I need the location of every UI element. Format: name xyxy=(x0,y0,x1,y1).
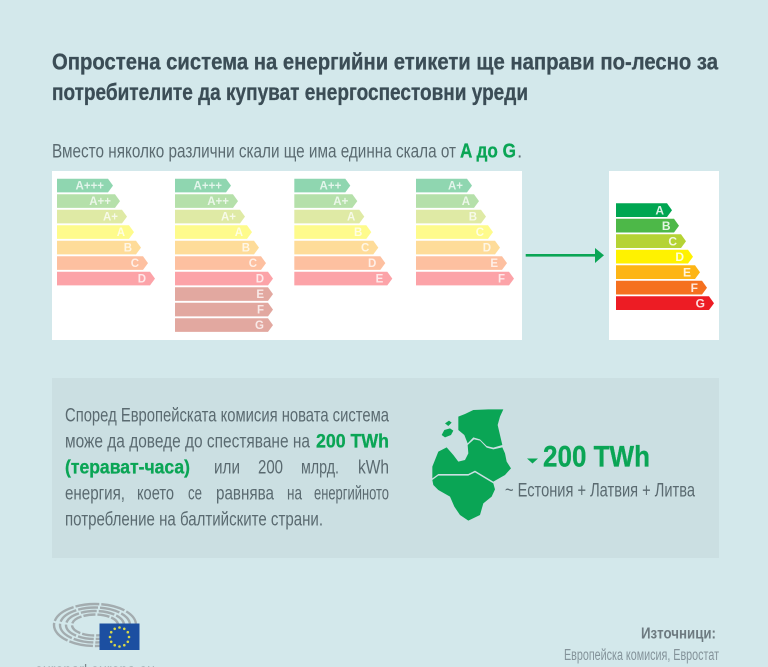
scale: A+++ to G: F xyxy=(257,305,264,317)
savings text block: kWh xyxy=(358,458,389,478)
sources xyxy=(564,626,719,664)
scale: A+++ to D: B xyxy=(124,243,132,255)
scale: A+++ to D: A+++ xyxy=(76,181,104,193)
panel: new A to G scale: G xyxy=(696,297,705,311)
savings text block: което xyxy=(137,484,174,504)
figure: 200 TWh: 200 TWh xyxy=(543,440,650,474)
scale: A++ to E: D xyxy=(368,258,376,270)
panel: new A to G scale: B xyxy=(662,219,671,233)
scale: A+++ to G: D xyxy=(256,274,264,286)
scale: A+++ to D: C xyxy=(131,258,139,270)
savings text block: потребление на балтийските страни. xyxy=(65,510,323,530)
scale: A+++ to G: E xyxy=(256,289,264,301)
panel: old energy label scales xyxy=(52,171,522,340)
scale: A+++ to G: C xyxy=(249,258,257,270)
savings text block xyxy=(65,406,389,530)
icon: hemicycle xyxy=(54,604,136,646)
title: потребителите да купуват енергоспестовни уреди xyxy=(52,79,528,105)
panel: new A to G scale xyxy=(609,171,719,340)
scale: A+++ to D: A+ xyxy=(103,212,118,224)
subtitle: . xyxy=(517,142,522,162)
scale: A+++ to D xyxy=(57,179,155,286)
savings text block: равнява xyxy=(216,484,274,504)
scale: A+ to F: F xyxy=(498,274,505,286)
savings text block: или xyxy=(214,458,240,478)
scale: A++ to E xyxy=(294,179,392,286)
scale: A+ to F: D xyxy=(483,243,491,255)
scale: A+ to F: B xyxy=(469,212,477,224)
panel: savings xyxy=(52,378,719,558)
scale: A+++ to G: A+ xyxy=(221,212,236,224)
panel: new A to G scale: E xyxy=(683,266,691,280)
icon: down triangle xyxy=(527,458,538,464)
savings text block: на xyxy=(287,484,302,504)
scale: A+++ to D: A xyxy=(117,227,125,239)
scale: A+ to F: A xyxy=(462,196,470,208)
subtitle: A до G xyxy=(460,140,516,162)
map: Baltic states xyxy=(432,409,511,521)
savings text block: (терават-часа) xyxy=(65,458,190,478)
savings text block: енергия, xyxy=(65,484,125,504)
savings text block: Според Европейската комисия новата система xyxy=(65,406,389,426)
scale: A+ to F xyxy=(416,179,514,286)
sources: Източници: xyxy=(641,626,716,642)
scale: A+++ to G: A+++ xyxy=(194,181,222,193)
scale: A++ to E: C xyxy=(361,243,369,255)
scale: A++ to E: B xyxy=(354,227,362,239)
panel: new A to G scale: F xyxy=(691,281,698,295)
icon: EU flag xyxy=(100,624,140,650)
panel: new A to G scale: A xyxy=(655,204,664,218)
title xyxy=(52,48,718,105)
scale: A+++ to G: G xyxy=(255,320,264,332)
logo: European Parliament xyxy=(35,604,155,667)
scale: A++ to E: A xyxy=(347,212,355,224)
arrow: old scales to new scale xyxy=(526,248,604,263)
savings text block: се xyxy=(188,484,202,504)
scale: A+++ to G: A xyxy=(235,227,243,239)
scale: A+++ to D: D xyxy=(138,274,146,286)
savings text block: 200 TWh xyxy=(316,432,389,452)
scale: A++ to E: E xyxy=(376,274,384,286)
scale: A+++ to G: A++ xyxy=(207,196,229,208)
scale: A+ to F: A+ xyxy=(448,181,463,193)
scale: A+ to F: C xyxy=(476,227,484,239)
savings text block: млрд. xyxy=(301,458,339,478)
caption: Baltic states sum: ~ Естония + Латвия + Литва xyxy=(505,480,695,502)
savings text block: енергийното xyxy=(314,484,389,504)
scale: A+ to F: E xyxy=(490,258,498,270)
savings text block: може да доведе до спестяване на xyxy=(65,432,310,452)
scale: A+++ to G: B xyxy=(242,243,250,255)
scale: A++ to E: A++ xyxy=(320,181,342,193)
panel: new A to G scale: D xyxy=(675,250,684,264)
scale: A+++ to D: A++ xyxy=(89,196,111,208)
savings text block: 200 xyxy=(258,458,283,478)
subtitle: Вместо няколко различни скали ще има единна скала от xyxy=(52,142,456,162)
scale: A++ to E: A+ xyxy=(333,196,349,208)
scale: A+++ to G xyxy=(175,179,273,332)
panel: new A to G scale: C xyxy=(668,235,677,249)
